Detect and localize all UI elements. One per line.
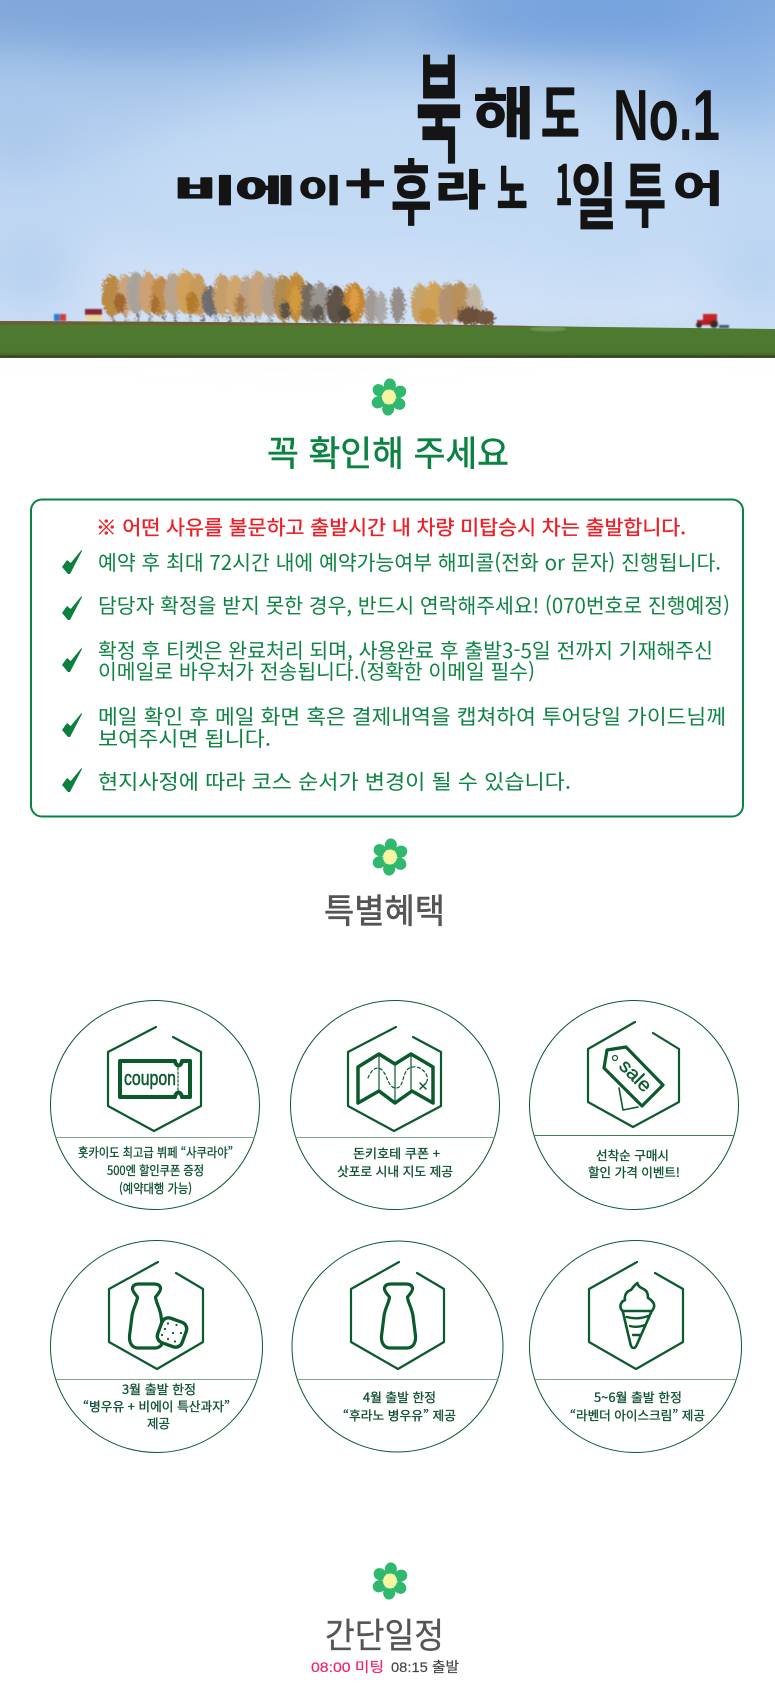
caption: 500엔 할인쿠폰 증정 <box>107 1160 204 1179</box>
heading: please check: 꼭 확인해 주세요 <box>267 426 509 477</box>
title handwriting line 2: 일 <box>571 139 617 244</box>
icon: red tractor <box>696 314 729 328</box>
title handwriting line 1: No.1 <box>613 76 720 156</box>
benefit circle 3: sale tag <box>530 1000 738 1210</box>
title handwriting line 1: 해 <box>473 69 535 150</box>
title handwriting line 2: 어 <box>673 160 724 213</box>
title handwriting line 1: 도 <box>541 65 580 156</box>
caption <box>337 1143 453 1180</box>
title handwriting line 2: 투 <box>624 140 666 242</box>
schedule times: 08:00 미팅 <box>311 1659 384 1675</box>
benefit circle 4: milk and biscuit <box>50 1240 262 1452</box>
panel: notices <box>31 500 743 816</box>
title handwriting line 2: 후 <box>391 137 431 241</box>
caption: 제공 <box>147 1413 170 1432</box>
icon: coupon: coupon <box>124 1068 176 1090</box>
caption: 4월 출발 한정 <box>363 1387 436 1406</box>
caption <box>570 1387 705 1424</box>
title handwriting line 1: 북 <box>416 15 462 187</box>
caption: 홋카이도 최고급 뷔페 “사쿠라야” <box>78 1142 233 1161</box>
caption: “후라노 병우유” 제공 <box>343 1405 456 1424</box>
check item 2: 담당자 확정을 받지 못한 경우, 반드시 연락해주세요! (070번호로 진행예정) <box>98 589 730 619</box>
benefit circle 5: milk bottle <box>292 1241 503 1452</box>
field <box>0 321 775 358</box>
icon: ice cream cone <box>620 1283 654 1348</box>
caption: “병우유 + 비에이 특산과자” <box>83 1396 230 1415</box>
check item 4: 보여주시면 됩니다. <box>98 722 271 752</box>
benefit circle 1: coupon <box>50 1000 260 1210</box>
caption: 3월 출발 한정 <box>122 1379 196 1398</box>
schedule times <box>311 1659 459 1675</box>
caption <box>78 1142 233 1197</box>
icon: flower 2 <box>370 837 410 877</box>
title handwriting line 2: 비 <box>173 166 237 211</box>
icon: sale tag: sale <box>614 1056 655 1097</box>
caption: 삿포로 시내 지도 제공 <box>337 1161 453 1180</box>
check item 5: 현지사정에 따라 코스 순서가 변경이 될 수 있습니다. <box>98 765 571 795</box>
heading: special benefits: 특별혜택 <box>324 884 445 933</box>
check item 1: 예약 후 최대 72시간 내에 예약가능여부 해피콜(전화 or 문자) 진행됩니다. <box>98 546 721 576</box>
title handwriting line 2: 라 <box>435 157 486 218</box>
caption <box>343 1387 456 1424</box>
hero: sky and field photo <box>0 0 775 358</box>
caption <box>588 1145 680 1181</box>
caption: 돈키호테 쿠폰 + <box>353 1143 440 1162</box>
title handwriting line 2: 이 <box>298 166 342 211</box>
check item 3 <box>62 634 713 685</box>
caption: “라벤더 아이스크림” 제공 <box>570 1405 705 1424</box>
caption: (예약대행 가능) <box>119 1178 192 1197</box>
benefit circle 2: map <box>290 1000 500 1210</box>
icon: house <box>85 309 102 321</box>
icon: flower 3 <box>370 1561 410 1601</box>
caption: 5~6월 출발 한정 <box>594 1387 682 1406</box>
icon: sale tag <box>604 1047 663 1110</box>
icon: flower 1 <box>369 377 409 417</box>
title handwriting line 2: + <box>344 141 386 220</box>
title handwriting line 2: 노 <box>497 145 527 224</box>
check item 4: 메일 확인 후 메일 화면 혹은 결제내역을 캡쳐하여 투어당일 가이드님께 <box>98 700 726 730</box>
title handwriting line 2: 1 <box>555 142 573 221</box>
icon: blue and red boxes <box>54 314 66 321</box>
heading: brief schedule: 간단일정 <box>325 1608 444 1659</box>
caption: 선착순 구매시 <box>596 1145 669 1164</box>
icon: milk bottle <box>381 1284 416 1348</box>
tree row <box>102 270 495 326</box>
caption: 할인 가격 이벤트! <box>588 1162 680 1181</box>
benefit circle 6: ice cream <box>530 1240 742 1452</box>
check item 3: 이메일로 바우처가 전송됩니다.(정확한 이메일 필수) <box>98 655 535 685</box>
title handwriting line 1 <box>416 15 720 187</box>
caption <box>83 1379 230 1432</box>
icon: milk bottle and biscuit <box>129 1284 189 1349</box>
title handwriting line 2: 에 <box>235 166 296 211</box>
schedule times: 08:15 출발 <box>391 1659 459 1675</box>
notice: red warning: ※ 어떤 사유를 불문하고 출발시간 내 차량 미탑승시 차는 출발합니다. <box>96 512 686 540</box>
icon: folded map <box>358 1054 433 1103</box>
title handwriting line 2 <box>173 137 724 244</box>
icon: coupon <box>120 1061 190 1097</box>
check item 3: 확정 후 티켓은 완료처리 되며, 사용완료 후 출발3-5일 전까지 기재해주신 <box>98 634 713 664</box>
check item 4 <box>62 700 726 752</box>
